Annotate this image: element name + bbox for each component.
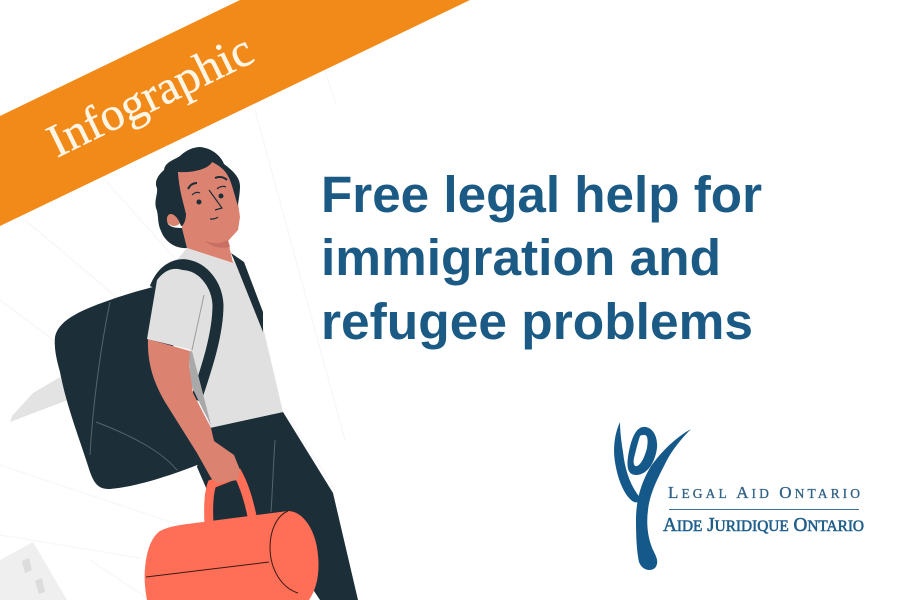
- logo text English: LEGAL AID ONTARIO: [668, 483, 860, 502]
- bag handle: [209, 474, 252, 524]
- trousers: [197, 412, 358, 600]
- background: grey building: [0, 542, 67, 600]
- heading: [321, 166, 762, 350]
- chin shadow: [205, 240, 230, 248]
- right shoulder strap: [231, 253, 263, 332]
- neck and face: [177, 160, 240, 263]
- logo rule: [669, 508, 859, 510]
- banner: orange diagonal ribbon: [0, 0, 470, 226]
- bag body: [145, 511, 319, 600]
- trouser crease: [271, 440, 275, 512]
- logo: Legal Aid Ontario: [614, 422, 864, 570]
- arm and hand: [148, 339, 240, 483]
- heading: refugee problems: [321, 293, 753, 350]
- shoulder strap: [155, 265, 218, 400]
- heading: Free legal help for: [321, 166, 762, 223]
- illustration: man with backpack and duffel bag: [55, 147, 358, 600]
- ear: [166, 210, 182, 226]
- banner label: Infographic: [39, 24, 261, 168]
- backpack: [55, 286, 205, 489]
- shirt: [150, 248, 283, 428]
- hair: [155, 147, 240, 248]
- arm shadow on shirt: [188, 351, 211, 425]
- heading: immigration and: [321, 229, 721, 286]
- logo text French: AIDE JURIDIQUE ONTARIO: [663, 514, 864, 536]
- logo figure: [614, 422, 691, 570]
- face details: [188, 177, 227, 219]
- sleeve: [147, 269, 204, 350]
- background: grey plane silhouette: [10, 377, 68, 422]
- sleeve fold: [192, 295, 204, 350]
- duffel bag: [145, 474, 319, 600]
